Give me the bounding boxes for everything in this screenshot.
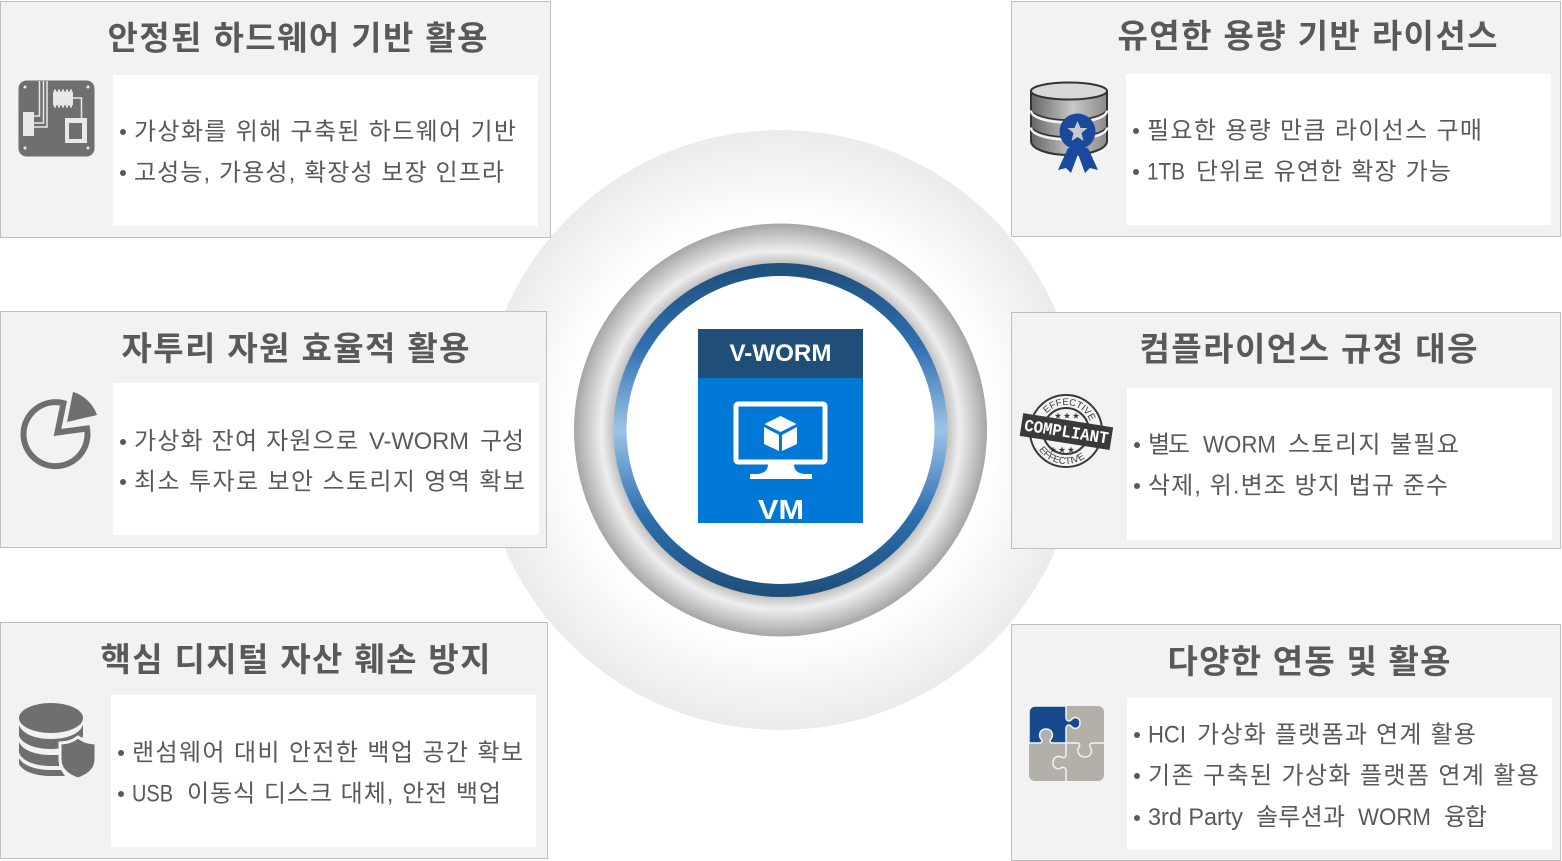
bullet text: HCI — [1148, 722, 1186, 748]
bullet text: 최소 투자로 보안 스토리지 영역 확보 — [134, 468, 525, 496]
bullet text: 랜섬웨어 대비 안전한 백업 공간 확보 — [132, 740, 523, 766]
bullet text — [1134, 432, 1459, 500]
icon: compliant stamp: ★★★ — [1050, 446, 1076, 454]
panel: spare resources — [0, 312, 546, 548]
icon: circuit board — [18, 80, 94, 156]
heading: 유연한 용량 기반 라이선스 — [1118, 18, 1498, 54]
bullet text: 기존 구축된 가상화 플랫폼 연계 활용 — [1148, 762, 1539, 790]
bullet text — [1133, 118, 1482, 186]
bullet text — [1134, 722, 1539, 831]
heading: 컴플라이언스 규정 대응 — [1140, 330, 1478, 368]
bullet text: 필요한 용량 만큼 라이선스 구매 — [1147, 118, 1482, 144]
VM label: VM — [758, 494, 804, 525]
bullet text — [120, 428, 525, 496]
icon: puzzle — [1029, 706, 1104, 781]
central circle graphic — [480, 130, 1080, 730]
bullet text: 스토리지 불필요 — [1288, 432, 1459, 458]
bullet text: 별도 — [1148, 432, 1190, 458]
bullet text: 3rd Party — [1148, 804, 1243, 831]
icon: pie chart — [24, 392, 97, 466]
bullet text: WORM — [1203, 432, 1276, 458]
panel: asset protection — [0, 622, 548, 858]
V-WORM VM block — [698, 329, 863, 525]
icon: compliant stamp: ★★★ — [1054, 412, 1082, 420]
bullet text: 가상화 플랫폼과 연계 활용 — [1197, 722, 1476, 748]
icon: database with shield — [19, 703, 96, 779]
bullet text: WORM — [1358, 804, 1431, 831]
bullet text — [118, 740, 523, 808]
bullet text: 1TB — [1147, 158, 1185, 186]
heading: 자투리 자원 효율적 활용 — [122, 330, 470, 367]
bullet text: V-WORM — [369, 428, 469, 455]
bullet text — [120, 118, 516, 186]
bullet text: USB — [132, 780, 173, 808]
bullet text: 고성능, 가용성, 확장성 보장 인프라 — [134, 160, 504, 186]
bullet text: 융합 — [1444, 804, 1487, 831]
panel: stable hardware — [0, 2, 550, 238]
icon: compliant stamp: EFFECTIVE — [1042, 398, 1096, 421]
panel: compliance — [1011, 312, 1561, 549]
bullet text: 이동식 디스크 대체, 안전 백업 — [187, 780, 501, 808]
bullet text: 솔루션과 — [1256, 804, 1345, 831]
heading: 다양한 연동 및 활용 — [1168, 643, 1450, 680]
bullet text: 구성 — [480, 428, 524, 455]
V-WORM label: V-WORM — [730, 340, 832, 367]
icon: compliant stamp: COMPLIANT — [1023, 418, 1110, 450]
bullet text: 가상화를 위해 구축된 하드웨어 기반 — [134, 118, 516, 146]
icon: monitor with cube — [736, 404, 825, 479]
bullet text: 단위로 유연한 확장 가능 — [1196, 158, 1451, 186]
icon: compliant stamp: EFFECTIVE — [1039, 446, 1085, 464]
icon: compliant stamp — [1020, 394, 1114, 468]
heading: 핵심 디지털 자산 훼손 방지 — [100, 641, 490, 678]
bullet text: 삭제, 위.변조 방지 법규 준수 — [1148, 472, 1448, 500]
icon: database with ribbon — [1031, 82, 1107, 173]
panel: flexible license — [1012, 2, 1560, 236]
panel: integration — [1012, 624, 1560, 860]
heading: 안정된 하드웨어 기반 활용 — [108, 20, 488, 56]
bullet text: 가상화 잔여 자원으로 — [134, 428, 358, 455]
